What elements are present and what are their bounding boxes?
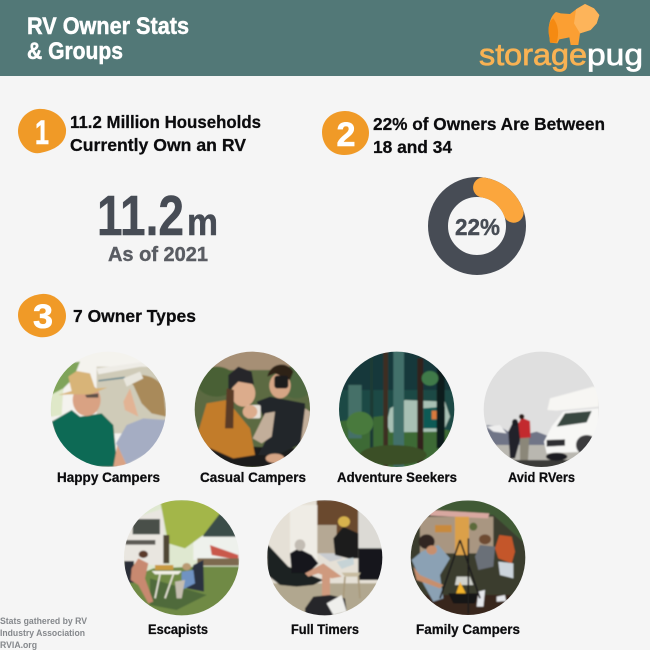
photo: full timers — [265, 498, 385, 618]
donut chart 22%: 22% — [455, 214, 500, 240]
badge 3: 3 — [33, 298, 53, 336]
label: Full Timers — [291, 622, 359, 637]
label: Happy Campers — [57, 470, 160, 485]
source note: Stats gathered by RV — [0, 616, 87, 626]
heading 2: 22% of Owners Are Between — [373, 114, 605, 134]
big stat 11.2m — [97, 184, 218, 266]
owner type: Avid RVers — [482, 350, 602, 485]
big stat 11.2m: 11.2 — [97, 184, 184, 248]
label: Casual Campers — [200, 470, 306, 485]
title: & Groups — [27, 38, 123, 65]
heading 2 — [373, 114, 605, 157]
source note — [0, 616, 87, 650]
photo: escapists — [122, 498, 242, 618]
donut chart 22% — [438, 187, 516, 265]
heading 1 — [70, 112, 261, 155]
photo: casual campers — [193, 350, 313, 470]
photo: happy campers — [50, 360, 166, 467]
heading 1: Currently Own an RV — [70, 135, 246, 155]
photo: avid rvers — [482, 350, 602, 470]
owner type: Happy Campers — [50, 360, 166, 486]
big stat 11.2m: m — [187, 202, 218, 244]
owner type: Casual Campers — [193, 350, 313, 485]
heading 2: 18 and 34 — [373, 137, 452, 157]
logo: storagepug: storage — [479, 37, 587, 72]
section 3 heading — [18, 294, 196, 337]
heading 3: 7 Owner Types — [73, 306, 196, 326]
logo: storagepug — [479, 4, 643, 72]
source note: Industry Association — [0, 628, 85, 638]
source note: RVIA.org — [0, 640, 37, 650]
title — [27, 13, 189, 65]
label: Family Campers — [416, 622, 520, 637]
label: Escapists — [148, 622, 208, 637]
owner type: Escapists — [122, 498, 242, 637]
photo: family campers — [410, 500, 527, 618]
badge 3 — [18, 294, 66, 337]
owner type: Family Campers — [410, 500, 527, 637]
logo: storagepug: pug — [587, 37, 643, 72]
photo: adventure seekers — [337, 350, 457, 470]
badge 2: 2 — [336, 116, 356, 154]
owner type: Full Timers — [265, 498, 385, 637]
section 2: owner age — [322, 111, 605, 265]
owner type: Adventure Seekers — [337, 350, 457, 485]
title: RV Owner Stats — [27, 13, 189, 40]
label: Avid RVers — [508, 470, 575, 485]
big stat 11.2m: As of 2021 — [108, 244, 208, 266]
badge 1 — [18, 109, 66, 153]
badge 1: 1 — [35, 114, 49, 152]
heading 1: 11.2 Million Households — [70, 112, 261, 132]
label: Adventure Seekers — [337, 470, 457, 485]
badge 2 — [322, 111, 369, 155]
section 1: households — [18, 109, 261, 266]
header banner — [0, 0, 650, 76]
